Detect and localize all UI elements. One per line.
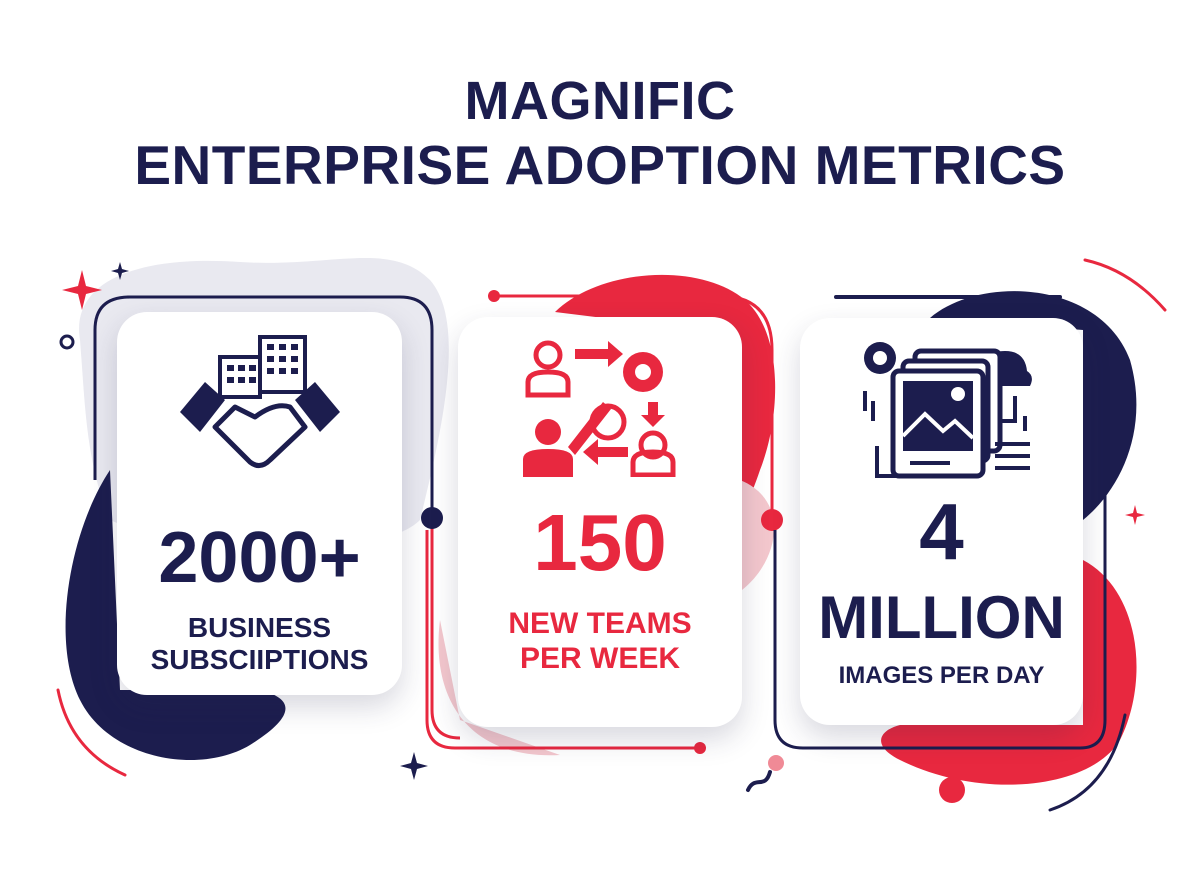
metric: 4 million: 4 [919, 487, 964, 576]
metric: 150: 150 [533, 498, 667, 587]
blob: grey behind card 1 [79, 258, 449, 550]
icon: image stack with gear and cloud [863, 342, 1032, 478]
panel: images per day [800, 318, 1083, 725]
title: ENTERPRISE ADOPTION METRICS [134, 134, 1066, 196]
label: new teams per week: NEW TEAMS [508, 607, 692, 640]
icon: team workflow [523, 340, 676, 477]
arcs [58, 690, 125, 775]
label: business subscriptions: SUBSCIIPTIONS [151, 644, 368, 675]
panel: images per day: MILLION [818, 584, 1065, 651]
icon: handshake with buildings [180, 335, 340, 468]
blob: red card 3 [881, 560, 1137, 785]
title [134, 71, 1066, 196]
sparkles [62, 270, 102, 310]
frame: card 2 red [494, 296, 772, 520]
metric: 2000+: 2000+ [158, 518, 361, 598]
blob: red behind card 2 [555, 275, 775, 530]
frame: card 1 navy [95, 297, 432, 518]
label: new teams per week [508, 607, 692, 674]
blob: navy card 3 [930, 291, 1136, 520]
frame: card 3 navy [836, 295, 1060, 299]
label: business subscriptions: BUSINESS [188, 612, 331, 643]
panel: new teams per week [458, 317, 742, 727]
panel: business subscriptions [117, 312, 402, 695]
label: images per day: IMAGES PER DAY [839, 662, 1044, 689]
label: new teams per week: PER WEEK [520, 642, 680, 674]
blob: navy bottom-left [66, 470, 285, 760]
blob: pale pink card 2 [438, 620, 560, 755]
title: MAGNIFIC [465, 71, 735, 131]
label: business subscriptions [151, 612, 368, 675]
